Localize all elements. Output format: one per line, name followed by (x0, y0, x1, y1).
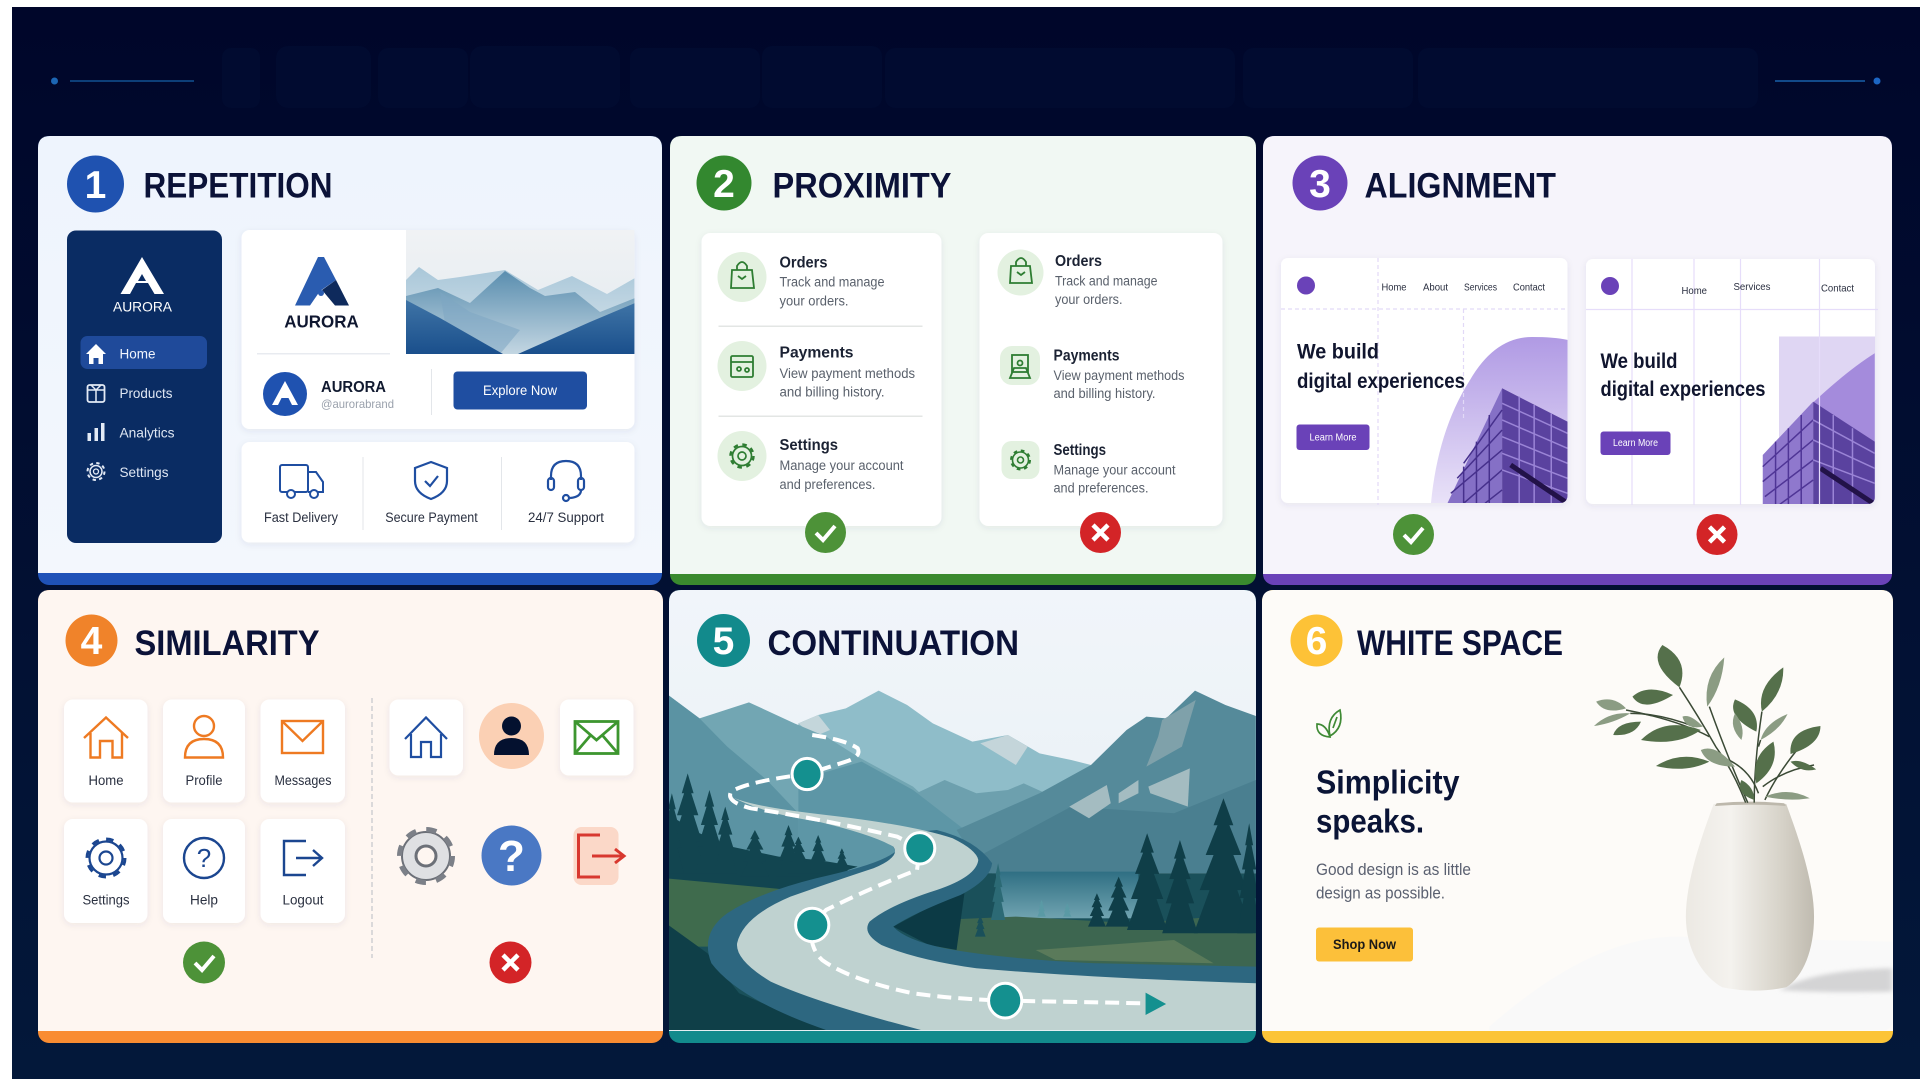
card 4 base (38, 590, 663, 1043)
headline: simplicity speaks (1316, 764, 1460, 840)
check badge (1393, 514, 1434, 555)
item: orders (718, 252, 884, 308)
icon: blue help: ? (498, 832, 525, 881)
nav: products: Products (120, 385, 172, 401)
item: settings: Settings (780, 437, 838, 454)
nav: settings: Settings (120, 464, 168, 480)
icon: green mail (560, 700, 634, 776)
sidebar logo (113, 257, 173, 314)
valley floor (666, 873, 1259, 1030)
stems (1626, 687, 1814, 803)
hero heading: digital experiences (1297, 370, 1465, 393)
route nodes (792, 758, 1022, 1018)
nav: settings (88, 463, 168, 480)
right forest (1088, 798, 1261, 933)
nav: analytics (88, 423, 174, 441)
incorrect list card (980, 233, 1222, 526)
item: orders wrong: Track and manage (1055, 274, 1158, 288)
divider (371, 698, 373, 958)
nav row: Home (1682, 285, 1707, 297)
hero visual (1431, 337, 1568, 503)
road edge (708, 830, 1256, 1030)
item: payments wrong (1000, 346, 1185, 401)
panel: continuation (660, 590, 1261, 1043)
card 6 base (1262, 590, 1893, 1043)
leaves pale (1594, 657, 1810, 800)
vase shadow (1780, 968, 1892, 992)
item: orders: Track and manage (780, 274, 884, 290)
badge 4: 4 (81, 620, 103, 663)
tile: settings: Settings (82, 892, 130, 908)
body text (1316, 860, 1471, 902)
hero heading: digital experiences (1600, 378, 1766, 401)
badge 5 (697, 614, 750, 667)
badge 4 (66, 614, 118, 666)
feature card (242, 442, 634, 542)
icon: blue home (390, 700, 463, 776)
badge 1 (67, 156, 124, 212)
icon: filled profile (479, 703, 544, 769)
cross badge (490, 942, 532, 984)
aligned mockup (1281, 258, 1568, 505)
badge 5: 5 (713, 620, 734, 663)
card 3 base (1263, 136, 1892, 585)
item: orders wrong: Orders (1055, 253, 1102, 270)
meadows (666, 877, 1256, 1030)
tile: help: ? (197, 843, 211, 873)
nav row: About (1423, 282, 1448, 294)
item: settings wrong: Manage your account (1054, 462, 1176, 478)
nav row: Contact (1821, 282, 1854, 294)
panel: proximity (670, 136, 1256, 585)
button: explore now: Explore Now (483, 382, 558, 398)
icon: headset (548, 461, 584, 501)
consistent icon grid (64, 700, 345, 923)
dashed route (730, 735, 1144, 1003)
back mountains (666, 691, 1091, 880)
item: payments wrong: Payments (1054, 348, 1120, 364)
route arrow (1146, 993, 1166, 1015)
icon: leaf (1317, 710, 1341, 737)
label: fast delivery: Fast Delivery (264, 510, 338, 525)
cross badge (1080, 512, 1121, 553)
tile: profile (163, 700, 245, 802)
brand row: @aurorabrand (321, 397, 394, 411)
nav row: Services (1464, 282, 1497, 294)
lake (996, 872, 1138, 918)
tile: messages (260, 700, 345, 802)
tile: help: Help (190, 892, 218, 908)
road surface (731, 797, 1256, 1030)
decor: left accent line (51, 78, 194, 84)
brand row: AURORA (321, 379, 386, 396)
tile: logout: Logout (282, 892, 324, 908)
label: secure payment: Secure Payment (385, 510, 478, 525)
item: settings: and preferences. (780, 477, 876, 492)
badge 2 (696, 156, 752, 210)
icon: blue help (482, 826, 542, 886)
landscape illustration (660, 691, 1261, 1030)
panel: similarity (38, 590, 663, 1043)
nav row: Home (1382, 282, 1407, 294)
misaligned mockup (1586, 259, 1878, 505)
badge 6: 6 (1306, 620, 1327, 663)
nav row: Contact (1513, 282, 1545, 294)
brand card (242, 230, 635, 429)
logo dot (1601, 277, 1619, 295)
tile: messages: Messages (274, 773, 332, 788)
panel: white space (1262, 590, 1893, 1043)
item: orders: Orders (780, 254, 828, 272)
item: orders wrong: your orders. (1055, 292, 1122, 307)
item: payments: and billing history. (780, 384, 884, 400)
item: settings wrong: and preferences. (1054, 480, 1148, 496)
left forest (660, 773, 858, 890)
heading: repetition: REPETITION (144, 166, 332, 206)
body text: Good design is as little (1316, 860, 1471, 879)
faded title band (222, 46, 1758, 108)
item: settings (718, 431, 904, 492)
item: payments wrong: and billing history. (1054, 386, 1156, 401)
heading: alignment: ALIGNMENT (1364, 166, 1556, 206)
nav row: Services (1734, 281, 1770, 293)
nav: home (80, 336, 207, 369)
nav: analytics: Analytics (120, 424, 174, 440)
heading: white space: WHITE SPACE (1357, 624, 1563, 663)
check badge (805, 512, 846, 553)
vase (1686, 802, 1814, 991)
brand row (263, 369, 432, 416)
cross badge (1696, 514, 1738, 555)
hero heading: We build (1600, 350, 1678, 373)
tile: home (64, 700, 148, 802)
nav row (1382, 282, 1545, 294)
nav: home: Home (120, 346, 156, 362)
panel: alignment (1263, 136, 1892, 585)
icon: truck (280, 465, 323, 498)
button: shop now (1316, 928, 1413, 962)
item: orders: your orders. (780, 294, 848, 308)
headline: simplicity speaks: Simplicity (1316, 764, 1460, 800)
item: payments wrong: View payment methods (1054, 368, 1185, 383)
main logo (284, 257, 359, 332)
card 5 base (669, 590, 1256, 1043)
button: shop now: Shop Now (1333, 936, 1396, 952)
tile: settings (64, 819, 148, 923)
guide lines (1586, 259, 1878, 505)
hero heading (1600, 350, 1766, 401)
icon: red logout (574, 827, 624, 885)
tile: profile: Profile (186, 773, 222, 788)
button: explore now (454, 372, 587, 410)
heading: continuation: CONTINUATION (768, 624, 1019, 663)
sidebar logo: AURORA (113, 298, 173, 314)
correct list card (702, 233, 942, 526)
card 1 base (38, 136, 662, 585)
table (1489, 937, 1892, 1030)
icon: shield (415, 462, 447, 499)
body text: design as possible. (1316, 884, 1445, 902)
headline: simplicity speaks: speaks. (1316, 802, 1424, 840)
check badge (183, 942, 225, 984)
alignment guides (1281, 258, 1568, 505)
hero heading (1297, 340, 1465, 393)
panel: repetition (38, 136, 662, 585)
tile: home: Home (88, 773, 124, 788)
label: 24/7 support: 24/7 Support (528, 510, 604, 525)
button: learn more: Learn More (1613, 438, 1658, 449)
nav row (1682, 281, 1854, 297)
item: settings wrong (1002, 441, 1176, 496)
hero visual (1763, 336, 1875, 504)
tile: help (163, 819, 245, 923)
heading: similarity: SIMILARITY (134, 624, 320, 663)
lakeside trees (975, 864, 1071, 937)
icon: grey gear (400, 830, 452, 882)
button: learn more (1600, 432, 1670, 455)
decor: right accent line (1775, 78, 1880, 84)
badge 1: 1 (85, 164, 106, 207)
button: learn more: Learn More (1310, 432, 1357, 444)
item: settings: Manage your account (780, 458, 904, 473)
main logo: AURORA (284, 312, 359, 332)
hero heading: We build (1297, 340, 1379, 364)
sidebar (67, 230, 222, 543)
badge 6 (1290, 614, 1342, 666)
logo dot (1297, 276, 1315, 294)
badge 3 (1292, 156, 1348, 210)
plant and vase (1489, 645, 1892, 1030)
item: orders wrong (998, 250, 1158, 307)
inconsistent icon grid (390, 700, 634, 886)
tile: logout (260, 819, 345, 923)
button: learn more (1296, 424, 1370, 450)
item: settings wrong: Settings (1054, 442, 1106, 459)
road hollow (893, 893, 964, 950)
right mountain (957, 691, 1256, 873)
leaves dark (1613, 645, 1820, 800)
heading: proximity: PROXIMITY (772, 166, 952, 206)
item: payments: Payments (780, 344, 854, 362)
item: payments (718, 341, 915, 400)
card 2 base (670, 136, 1256, 585)
mountain image (406, 230, 635, 354)
nav: products (88, 385, 172, 402)
badge 3: 3 (1309, 163, 1331, 206)
badge 2: 2 (713, 163, 735, 206)
item: payments: View payment methods (780, 366, 915, 381)
